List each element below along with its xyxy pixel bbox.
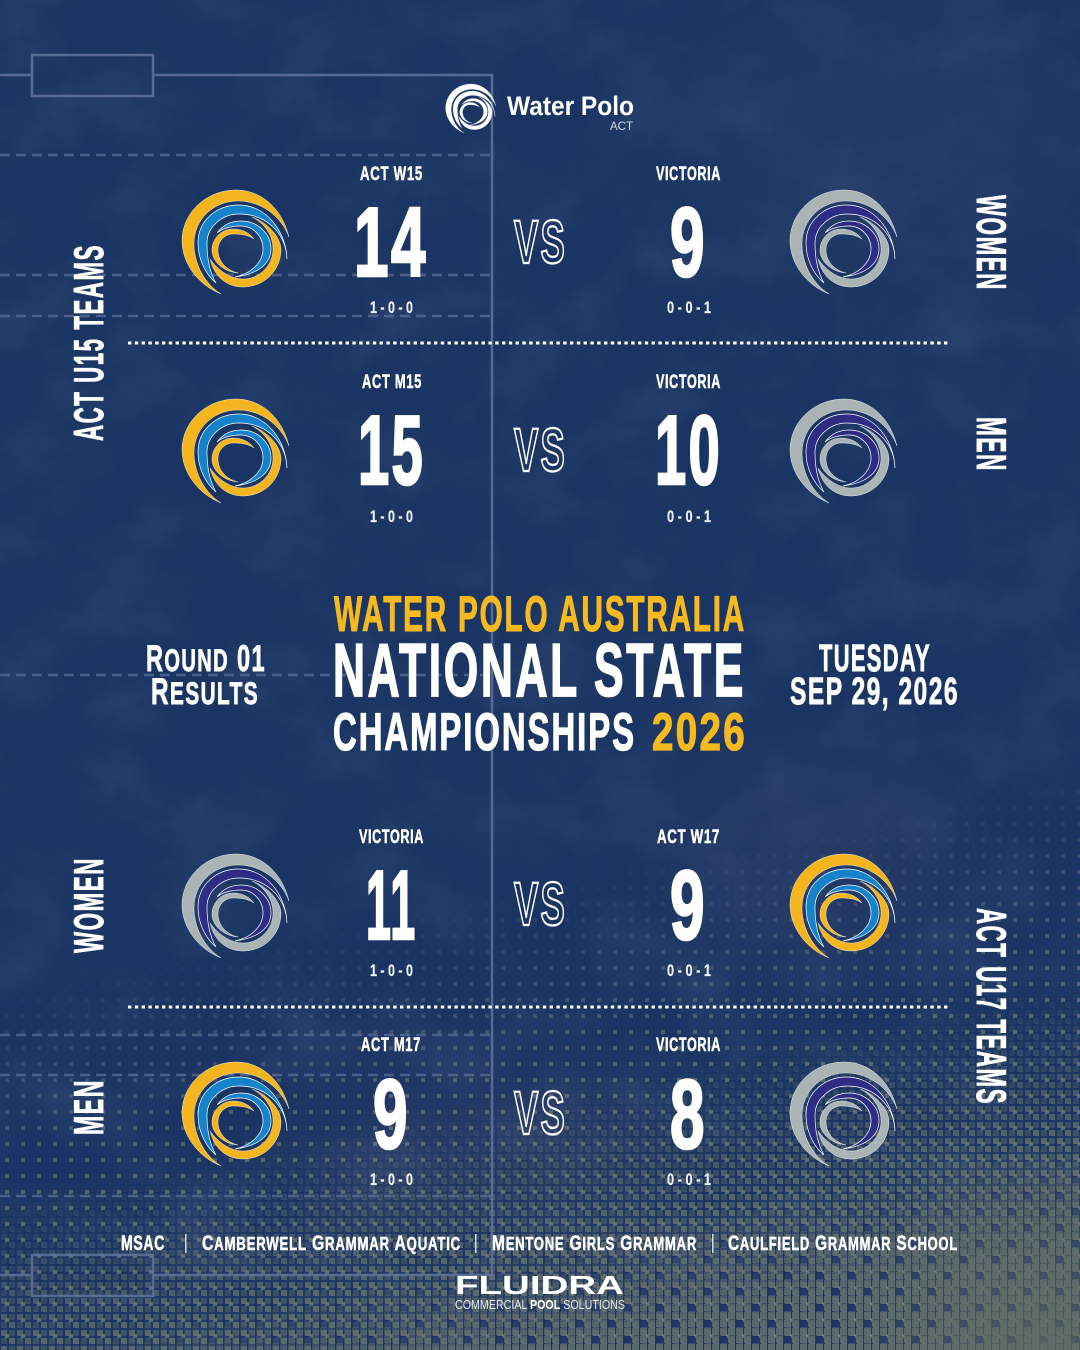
- vs: VS: [514, 870, 567, 938]
- team name: ACT M17: [361, 1034, 421, 1056]
- venues list: MSAC: [121, 1231, 165, 1255]
- record: 0 - 0 - 1: [667, 508, 711, 526]
- side label: Women bottom: WOMEN: [65, 857, 112, 953]
- title: [333, 586, 747, 762]
- team name: VICTORIA: [359, 826, 424, 848]
- venues list: CAULFIELD GRAMMAR SCHOOL: [728, 1231, 958, 1255]
- team name: ACT M15: [362, 371, 422, 393]
- record: 1 - 0 - 0: [370, 508, 413, 526]
- side label: ACT U17 Teams: ACT U17 TEAMS: [968, 908, 1015, 1105]
- record: 0 - 0 - 1: [667, 962, 711, 980]
- icon: Victoria crest: [790, 399, 897, 503]
- record: 1 - 0 - 0: [370, 962, 413, 980]
- venues list: MENTONE GIRLS GRAMMAR: [492, 1231, 697, 1255]
- date: [790, 638, 959, 713]
- match: ACT M15 vs Victoria: [182, 371, 897, 526]
- round label: [146, 638, 266, 712]
- match: ACT W15 vs Victoria: [182, 163, 897, 317]
- sponsor: Fluidra: COMMERCIAL POOL SOLUTIONS: [455, 1298, 625, 1312]
- title: 2026: [652, 703, 747, 762]
- icon: ACT crest: [182, 399, 289, 503]
- vs: VS: [514, 416, 567, 484]
- team name: VICTORIA: [656, 1034, 721, 1056]
- score: 14: [354, 187, 428, 297]
- sponsor: Fluidra: [455, 1270, 625, 1312]
- sponsor: Fluidra: FLUIDRA: [455, 1270, 624, 1300]
- title: CHAMPIONSHIPS: [333, 703, 636, 762]
- match: Victoria vs ACT W17: [182, 826, 897, 980]
- logo: Water Polo ACT: [446, 84, 634, 133]
- venues list: CAMBERWELL GRAMMAR AQUATIC: [202, 1231, 461, 1255]
- record: 1 - 0 - 0: [370, 299, 413, 317]
- icon: Victoria crest: [790, 190, 897, 294]
- date: SEP 29, 2026: [790, 671, 959, 713]
- halftone pixel grid: [1, 806, 1080, 1350]
- round label: RESULTS: [151, 671, 259, 712]
- match: Victoria vs ACT W17: 11: [366, 850, 417, 960]
- match: ACT M17 vs Victoria: [182, 1034, 897, 1189]
- side label: Women top: WOMEN: [968, 195, 1015, 291]
- logo: Water Polo ACT: Water Polo: [507, 91, 634, 121]
- team name: ACT W17: [657, 826, 720, 848]
- score: 15: [358, 395, 425, 505]
- icon: ACT crest: [182, 190, 289, 294]
- record: 0 - 0 - 1: [667, 299, 711, 317]
- score: 10: [655, 395, 722, 505]
- date: TUESDAY: [819, 638, 931, 680]
- pool field markings: [0, 55, 492, 1296]
- team name: VICTORIA: [656, 371, 721, 393]
- record: 0 - 0 - 1: [667, 1171, 711, 1189]
- icon: Victoria crest: [182, 854, 289, 958]
- icon: Victoria crest: [790, 1062, 897, 1166]
- icon: ACT crest: [790, 854, 897, 958]
- venues list: [121, 1231, 958, 1255]
- round label: ROUND 01: [146, 638, 266, 679]
- side label: ACT U15 Teams: ACT U15 TEAMS: [65, 244, 112, 441]
- divider: [128, 1006, 948, 1008]
- score: 9: [373, 1059, 410, 1169]
- logo: Water Polo ACT: ACT: [610, 119, 634, 133]
- team name: ACT W15: [360, 163, 423, 185]
- score: 8: [670, 1059, 707, 1169]
- score: 9: [670, 850, 707, 960]
- title: WATER POLO AUSTRALIA: [334, 586, 746, 642]
- side label: Men top: MEN: [968, 417, 1015, 472]
- divider: [128, 342, 948, 344]
- icon: ACT crest: [182, 1062, 289, 1166]
- score: 9: [670, 187, 707, 297]
- record: 1 - 0 - 0: [370, 1171, 413, 1189]
- vs: VS: [514, 1079, 567, 1147]
- title: NATIONAL STATE: [333, 628, 746, 712]
- vs: VS: [514, 208, 567, 276]
- side label: Men bottom: MEN: [65, 1079, 112, 1135]
- team name: VICTORIA: [656, 163, 721, 185]
